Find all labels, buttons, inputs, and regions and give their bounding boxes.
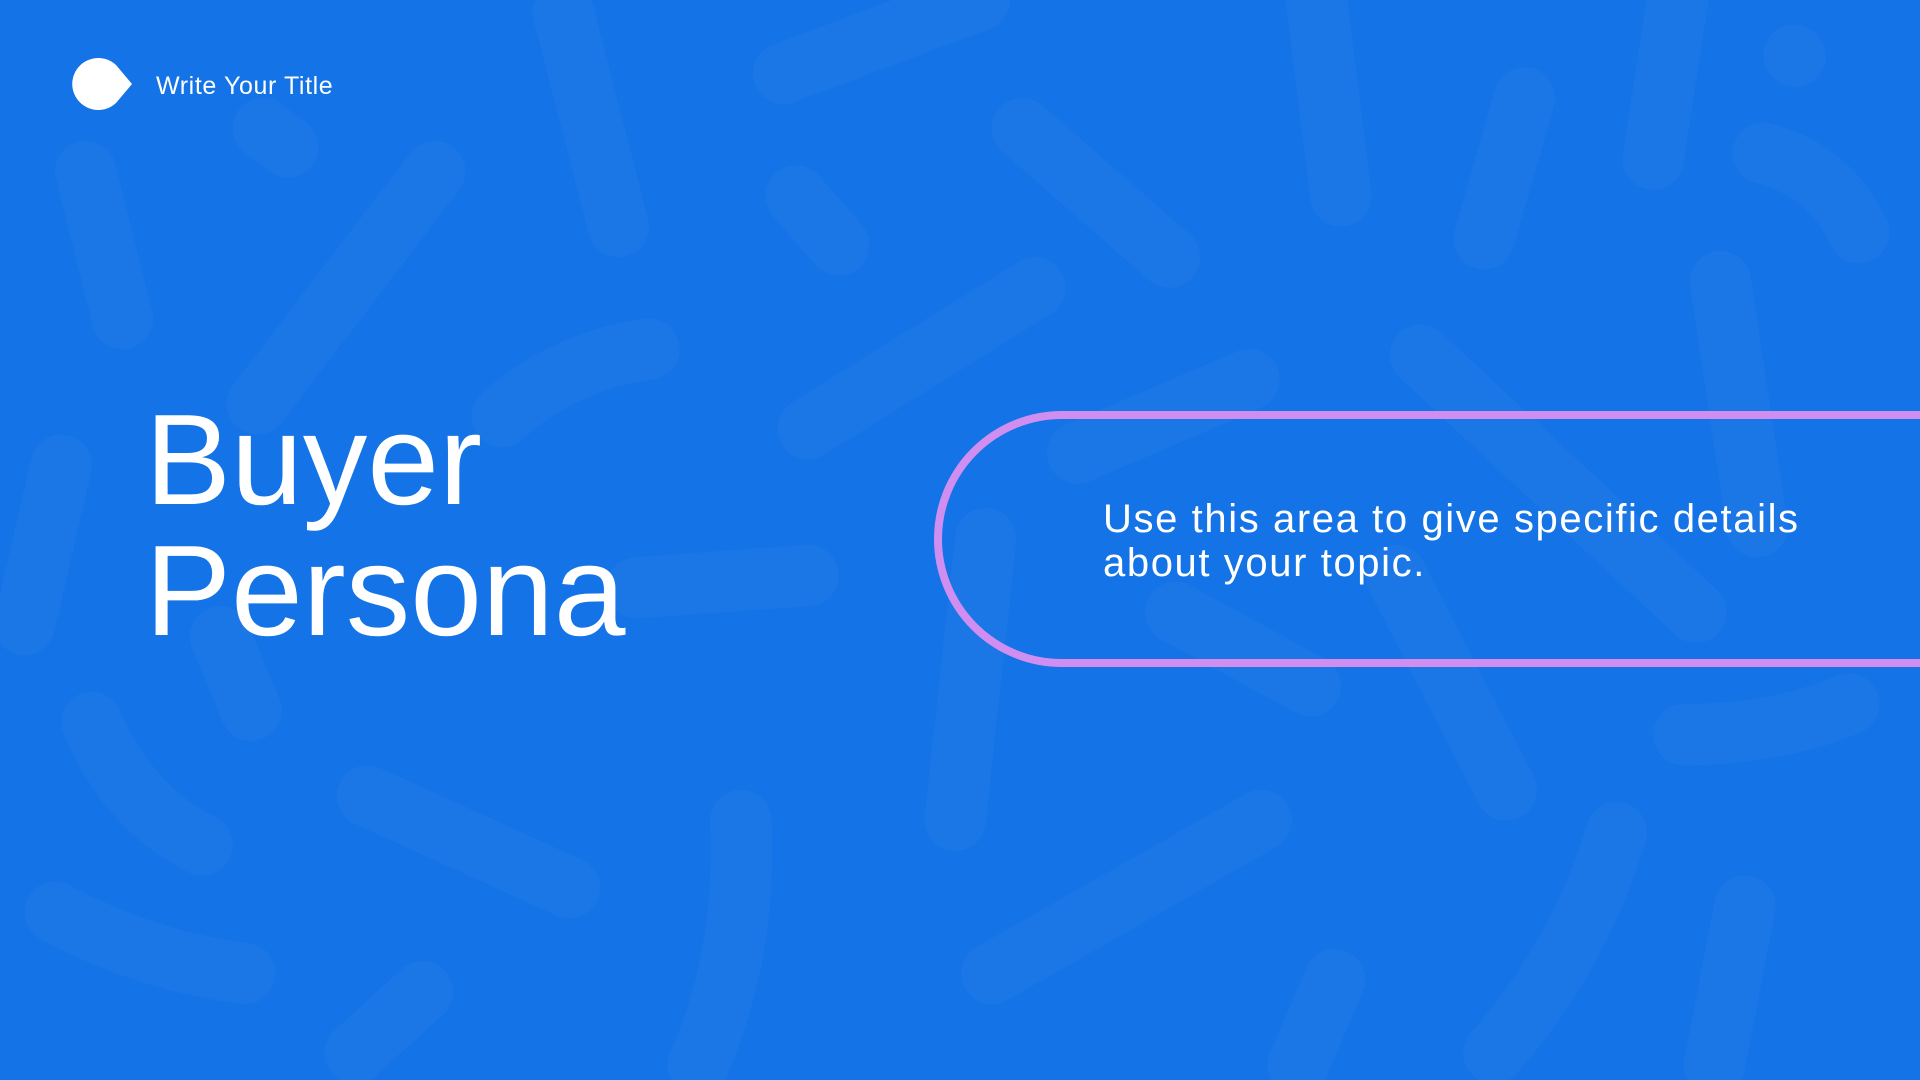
- callout text: about your topic.: [1103, 541, 1426, 585]
- logo icon: [72, 58, 132, 110]
- main title: Buyer: [145, 388, 482, 532]
- header title: Write Your Title: [156, 72, 333, 100]
- main title: Persona: [145, 519, 625, 663]
- main title: [145, 388, 626, 663]
- callout pill: [934, 411, 1920, 667]
- callout text: [1103, 497, 1800, 585]
- callout text: Use this area to give specific details: [1103, 497, 1800, 541]
